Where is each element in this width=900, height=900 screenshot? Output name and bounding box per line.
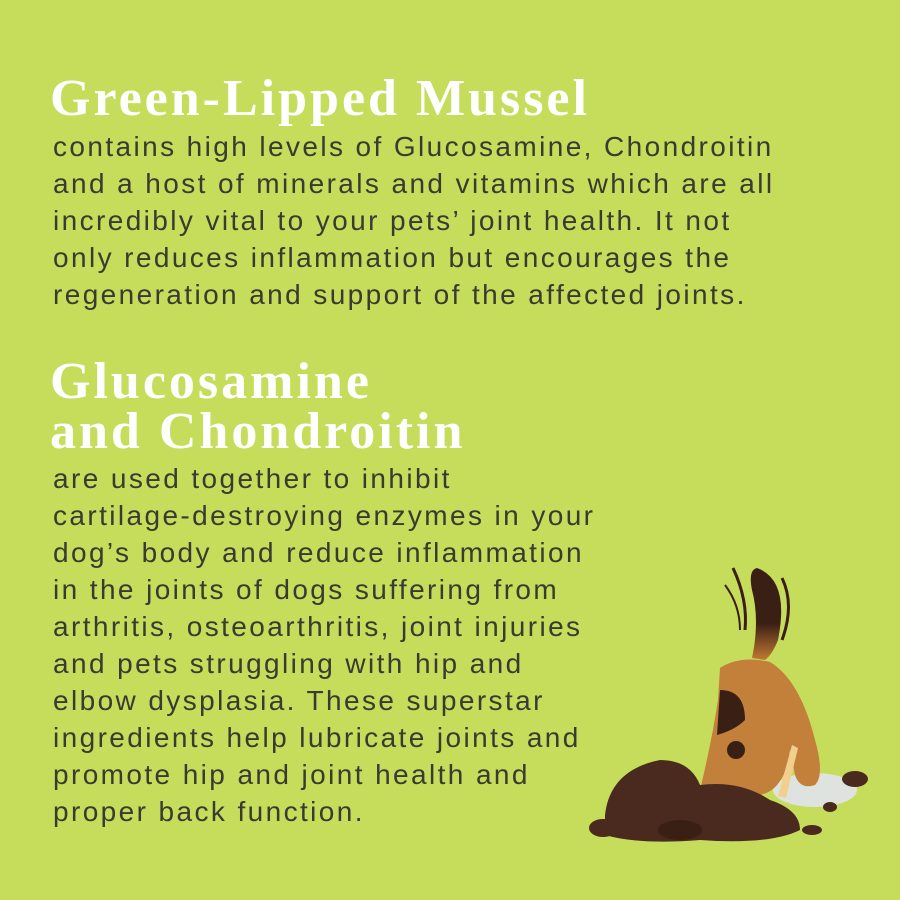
text block: mussel description: [53, 131, 774, 310]
text block: glucosamine description: promote hip and joint health and: [53, 759, 530, 790]
text block: glucosamine description: [53, 463, 595, 827]
text block: mussel description: contains high levels of Glucosamine, Chondroitin: [53, 131, 774, 162]
text block: glucosamine description: cartilage-destroying enzymes in your: [53, 500, 595, 531]
text block: glucosamine description: ingredients help lubricate joints and: [53, 722, 581, 753]
text block: glucosamine description: proper back function.: [53, 796, 365, 827]
text block: mussel description: and a host of minerals and vitamins which are all: [53, 168, 774, 199]
text block: glucosamine description: arthritis, osteoarthritis, joint injuries: [53, 611, 582, 642]
text block: glucosamine description: and pets struggling with hip and: [53, 648, 524, 679]
text block: glucosamine description: are used together to inhibit: [53, 463, 452, 494]
text block: mussel description: regeneration and support of the affected joints.: [53, 279, 747, 310]
text block: glucosamine description: dog’s body and reduce inflammation: [53, 537, 584, 568]
text block: mussel description: only reduces inflammation but encourages the: [53, 242, 731, 273]
title: Glucosamine and Chondroitin: [50, 353, 465, 460]
title: Glucosamine and Chondroitin: Glucosamine: [50, 353, 372, 410]
title: Green-Lipped Mussel: Green-Lipped Mussel: [50, 70, 590, 127]
title: Glucosamine and Chondroitin: and Chondroitin: [50, 403, 465, 460]
text block: glucosamine description: in the joints of dogs suffering from: [53, 574, 559, 605]
text block: glucosamine description: elbow dysplasia. These superstar: [53, 685, 545, 716]
text block: mussel description: incredibly vital to your pets’ joint health. It not: [53, 205, 732, 236]
